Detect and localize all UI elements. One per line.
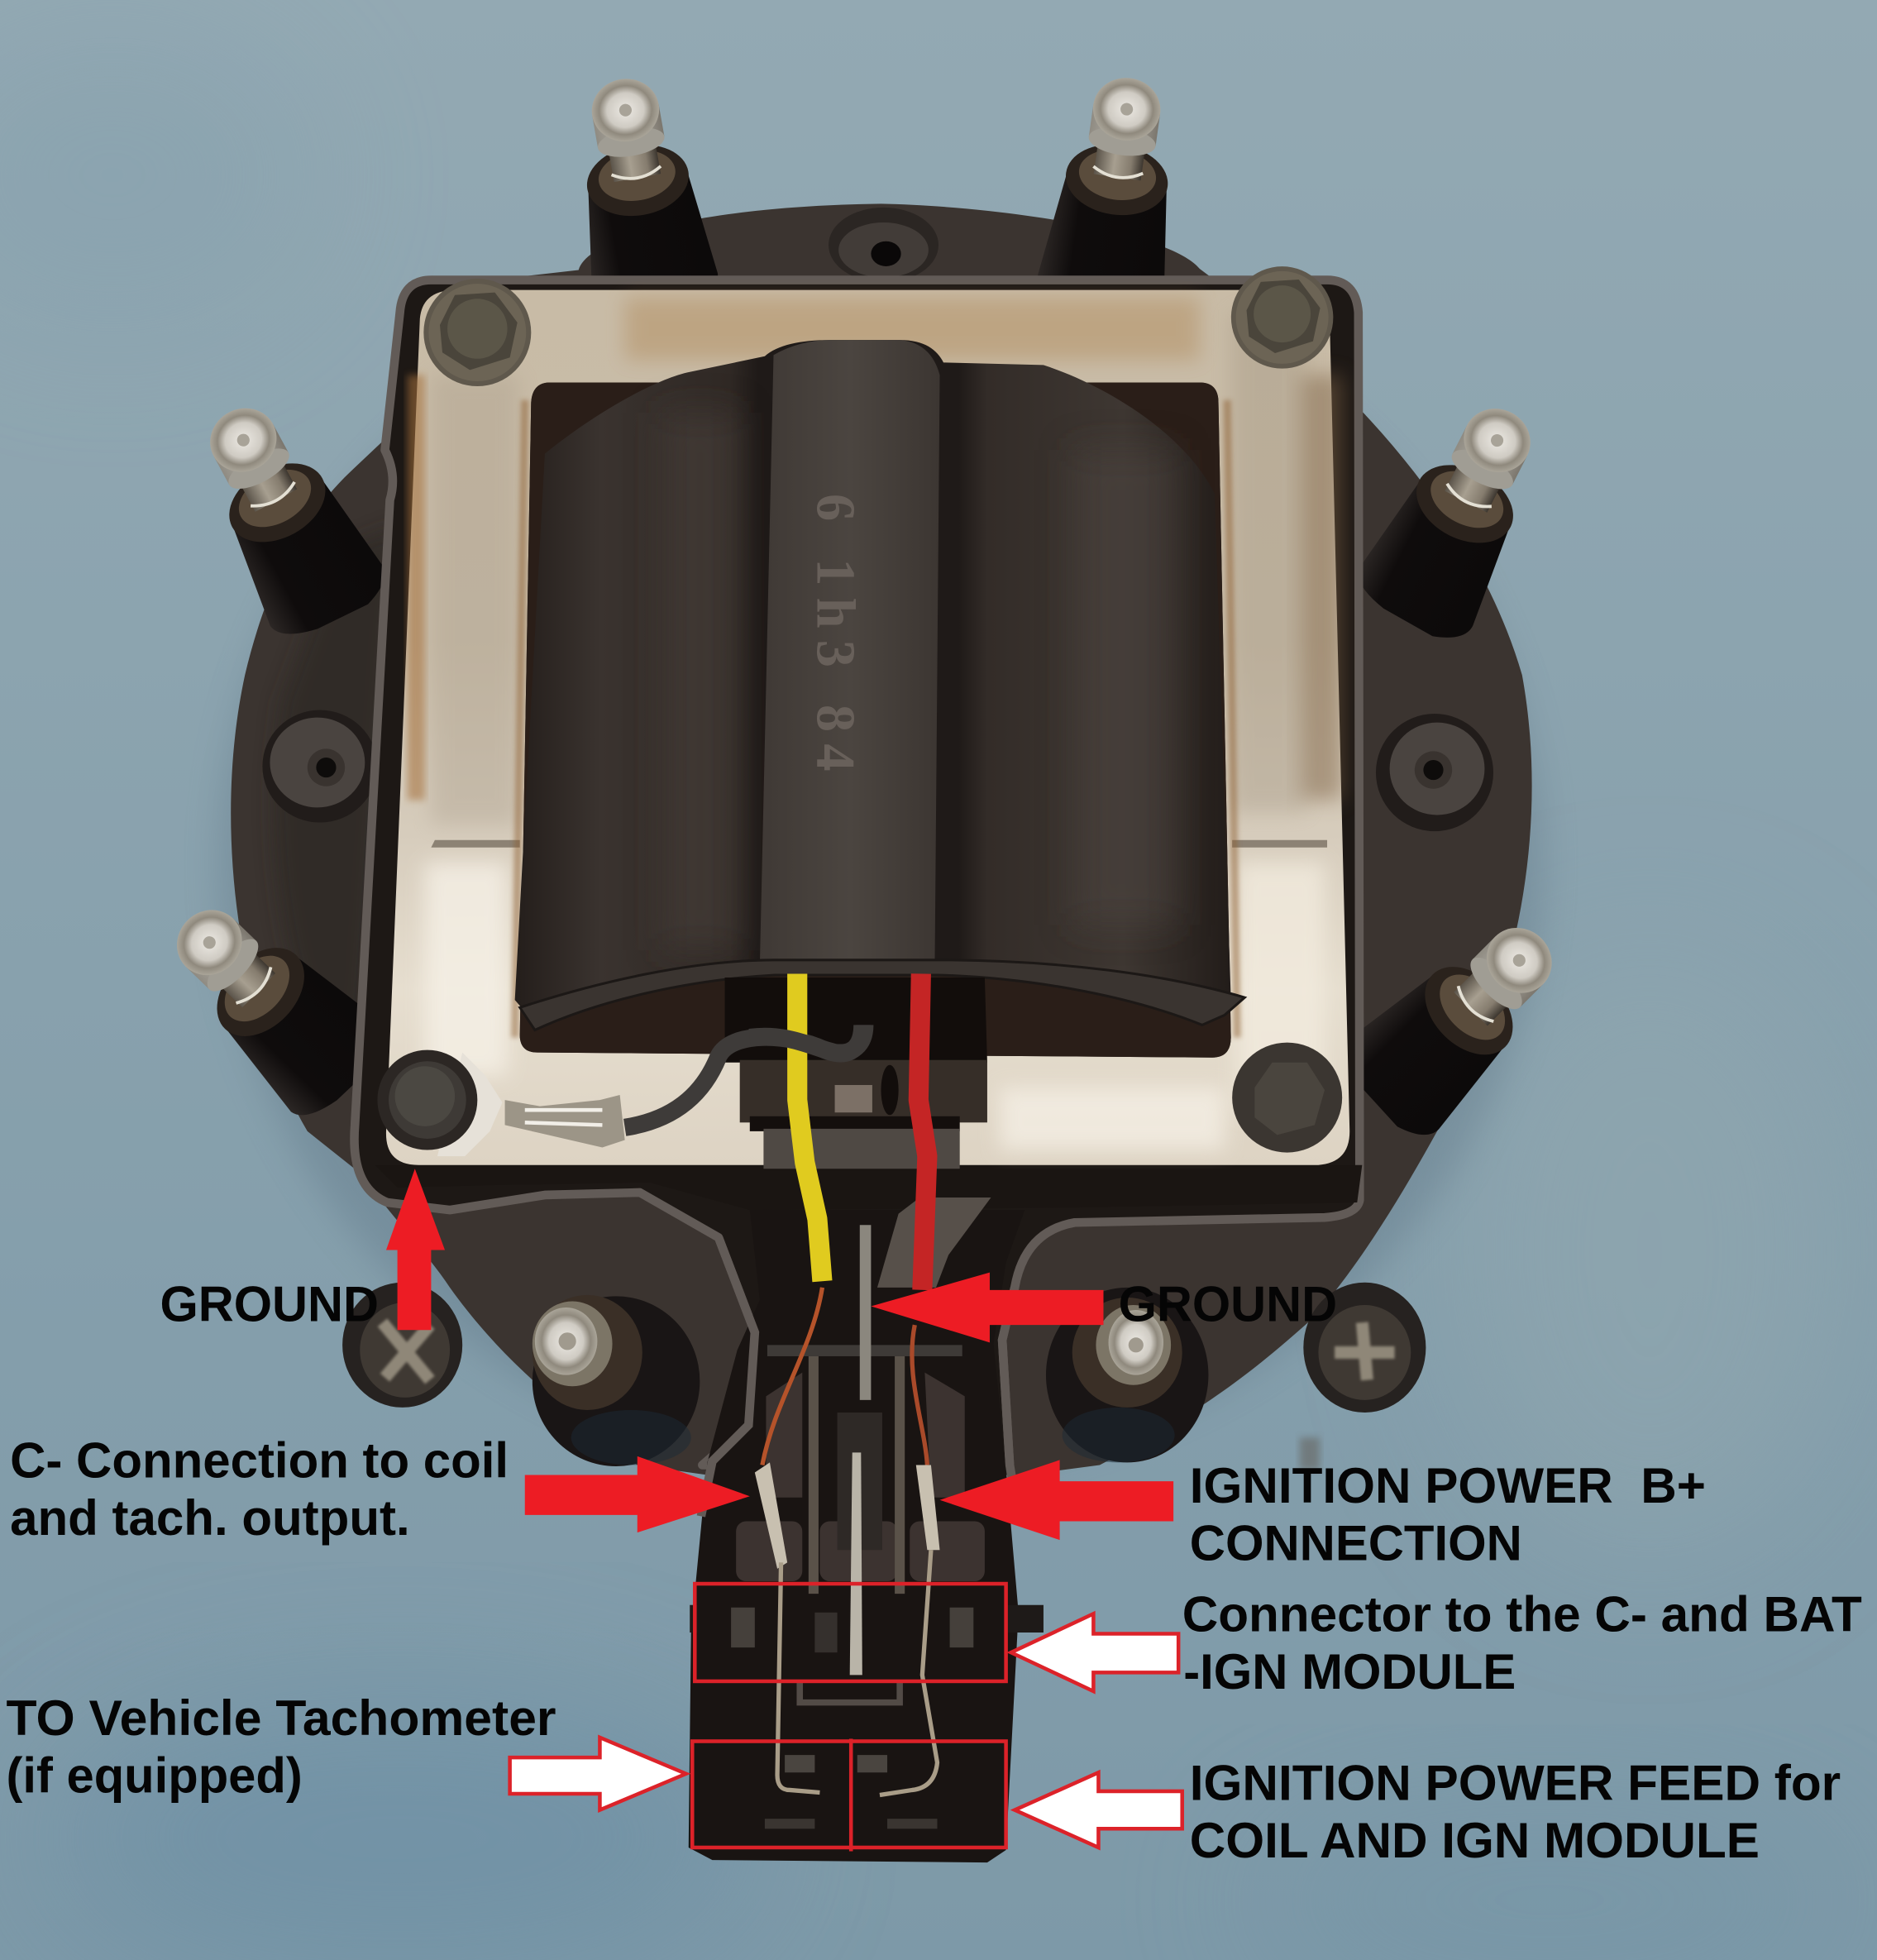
- label: C- connection: C- Connection to coil: [10, 1432, 509, 1489]
- stray pin behind cap: [1300, 1437, 1320, 1470]
- arrow: connector to module: [1011, 1613, 1178, 1691]
- lower terminal right: [1046, 1288, 1208, 1462]
- side boss left: [262, 710, 377, 823]
- arrow: ignition power feed: [1015, 1772, 1182, 1848]
- label: ignition power feed: [1190, 1755, 1841, 1868]
- embossed part number: 6 1h3 84: [805, 494, 865, 772]
- red outline: lower two-pin connector: [692, 1738, 1006, 1852]
- terminal tower: lower right: [1330, 892, 1585, 1149]
- coil wear patches: [662, 413, 1175, 950]
- lower cap section with connector: [689, 1210, 1024, 1862]
- drop shadow under cap: [218, 250, 1543, 1475]
- coil block: [515, 340, 1244, 1030]
- ring lug at ground bolt: [437, 1053, 503, 1156]
- bracket tongue under frame: [877, 1198, 991, 1288]
- arrow: C- connection: [525, 1456, 750, 1532]
- arrow: ground left: [871, 1273, 1103, 1342]
- terminal tower: lower left: [141, 876, 399, 1131]
- copper wire left: [762, 1288, 822, 1465]
- label: ignition power feed: IGNITION POWER FEED for: [1190, 1755, 1841, 1811]
- coil well interior: [520, 383, 1231, 1058]
- top screw boss: [829, 208, 938, 283]
- side boss right: [1376, 714, 1493, 831]
- metal frame plate: [386, 290, 1349, 1165]
- terminal tower: upper right: [1347, 383, 1567, 650]
- label: ignition power B+: [1190, 1457, 1706, 1570]
- red wire: [919, 973, 927, 1290]
- terminal tower: upper left: [171, 383, 395, 650]
- bolt top left: [423, 279, 531, 386]
- ground crimp and grey wire: [505, 1025, 862, 1148]
- ground bolt lower left: [377, 1050, 477, 1150]
- grey wire crossing yellow wire: [750, 1025, 865, 1053]
- label: C- connection: [10, 1432, 509, 1546]
- label: ignition power B+: CONNECTION: [1190, 1514, 1522, 1570]
- terminal tower: top right: [1034, 69, 1193, 320]
- dark channel under frame: [375, 1165, 1362, 1210]
- connector details: [690, 1345, 1044, 1829]
- terminal tower: top left: [556, 69, 723, 323]
- cap body: [231, 203, 1532, 1475]
- rust and wear marks on plate: [408, 298, 1342, 1150]
- label: vehicle tachometer: [7, 1690, 556, 1803]
- label: ground left: GROUND: [160, 1276, 379, 1332]
- label: C- connection: and tach. output.: [10, 1489, 410, 1546]
- copper wire right: [912, 1325, 927, 1465]
- red outline: connector to C- and BAT module: [695, 1584, 1006, 1681]
- arrow: ground up: [386, 1169, 445, 1330]
- label: ground right: GROUND: [1119, 1276, 1337, 1332]
- label: connector to module: -IGN MODULE: [1183, 1643, 1516, 1699]
- label: connector to module: Connector to the C- and BAT: [1182, 1585, 1862, 1642]
- centre metal ground strap: [850, 1225, 871, 1675]
- wire opening and terminal block: [725, 978, 987, 1169]
- grey rim ridge around square frame: [355, 280, 1359, 1465]
- bolt lower right: [1232, 1043, 1342, 1153]
- distributor cap photo: [141, 69, 1585, 1862]
- label: vehicle tachometer: TO Vehicle Tachometer: [7, 1690, 556, 1746]
- mounting screw right: [1303, 1283, 1426, 1413]
- lower terminal left: [533, 1295, 700, 1466]
- label: connector to module: [1182, 1585, 1862, 1699]
- bolt top right: [1231, 266, 1333, 369]
- arrow: to tachometer: [510, 1738, 686, 1810]
- darker shading on body near rim: [273, 525, 400, 1063]
- coil front lip: [520, 960, 1244, 1030]
- yellow wire: [797, 973, 822, 1281]
- label: ignition power feed: COIL AND IGN MODULE: [1190, 1812, 1760, 1868]
- mounting screw left: [342, 1283, 462, 1408]
- label: ignition power B+: IGNITION POWER B+: [1190, 1457, 1706, 1513]
- grey ridges round lower terminals: [701, 1237, 1019, 1516]
- label: vehicle tachometer: (if equipped): [7, 1747, 303, 1803]
- left crimp terminal and lead: [755, 1462, 819, 1792]
- coil centre ridge: [760, 340, 940, 965]
- arrow: B+ connection: [940, 1460, 1173, 1540]
- right crimp terminal and lead: [880, 1465, 940, 1795]
